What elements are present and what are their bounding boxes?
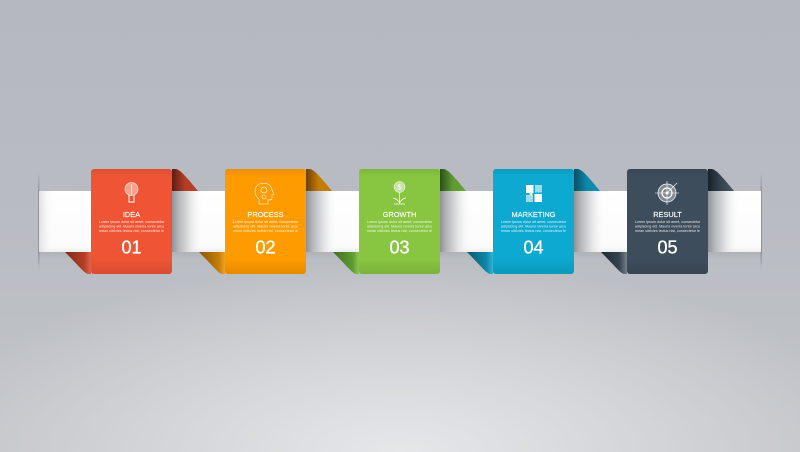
heading: idea: IDEA <box>123 210 140 219</box>
body text <box>367 220 433 233</box>
white ribbon band <box>39 191 761 252</box>
icon: head with gears <box>255 183 274 204</box>
body text: mean ultricies lectus nisi, consectetur le <box>501 229 566 233</box>
step 4: marketing <box>467 169 606 274</box>
heading: growth: GROWTH <box>383 210 416 219</box>
body text: Lorem ipsum dolor sit amet, consectetur <box>233 220 299 224</box>
heading: result: RESULT <box>653 210 682 219</box>
step 3: growth <box>333 169 472 274</box>
body text <box>233 220 299 233</box>
ribbon left shading <box>39 191 55 252</box>
step 5: result <box>601 169 740 274</box>
right slit <box>760 173 762 271</box>
body text: adipiscing elit. Mauris viverra tortor arcu <box>635 224 700 228</box>
step 2: process <box>199 169 338 274</box>
heading: marketing: MARKETING <box>512 210 556 219</box>
number: 04: 04 <box>523 238 544 258</box>
icon: puzzle <box>526 185 542 202</box>
body text <box>99 220 165 233</box>
body text: adipiscing elit. Mauris viverra tortor arcu <box>233 224 298 228</box>
body text: adipiscing elit. Mauris viverra tortor arcu <box>99 224 164 228</box>
body text <box>501 220 567 233</box>
body text: Lorem ipsum dolor sit amet, consectetur <box>635 220 701 224</box>
number: 02: 02 <box>255 238 276 258</box>
left slit <box>38 173 40 271</box>
body text <box>635 220 701 233</box>
step 1: idea <box>65 169 204 274</box>
body text: Lorem ipsum dolor sit amet, consectetur <box>367 220 433 224</box>
body text: Lorem ipsum dolor sit amet, consectetur <box>501 220 567 224</box>
heading: process: PROCESS <box>247 210 284 219</box>
number: 03: 03 <box>389 238 410 258</box>
body text: adipiscing elit. Mauris viverra tortor arcu <box>367 224 432 228</box>
ribbon shadow below <box>39 252 761 260</box>
body text: adipiscing elit. Mauris viverra tortor arcu <box>501 224 566 228</box>
icon: target <box>655 181 679 205</box>
number: 01: 01 <box>121 238 142 258</box>
body text: mean ultricies lectus nisi, consectetur le <box>99 229 164 233</box>
icon: light bulb <box>125 182 138 202</box>
body text: mean ultricies lectus nisi, consectetur le <box>635 229 700 233</box>
number: 05: 05 <box>657 238 678 258</box>
body text: mean ultricies lectus nisi, consectetur le <box>367 229 432 233</box>
body text: mean ultricies lectus nisi, consectetur le <box>233 229 298 233</box>
body text: Lorem ipsum dolor sit amet, consectetur <box>99 220 165 224</box>
icon: money plant: $ <box>398 184 402 192</box>
